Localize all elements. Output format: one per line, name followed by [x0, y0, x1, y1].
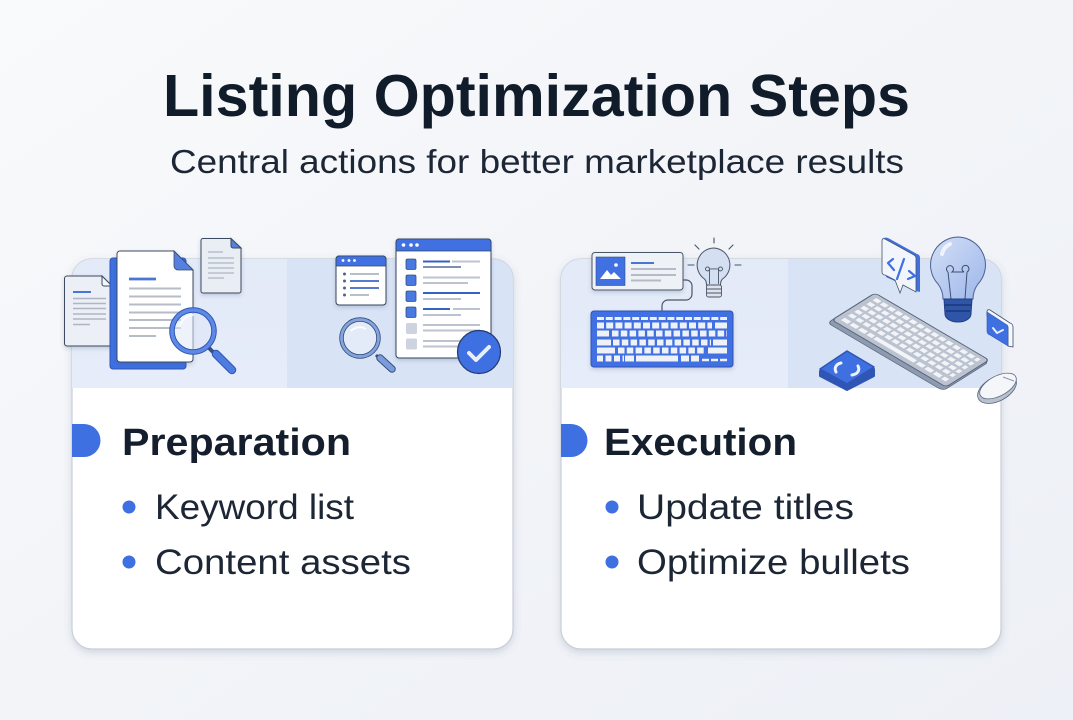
- icon: flat keyboard with card and bulb: [591, 238, 741, 367]
- icon: flat keyboard: [591, 311, 733, 367]
- icon: 3D light bulb: [931, 237, 985, 322]
- title: Listing Optimization Steps: [163, 63, 910, 129]
- list item: optimize bullets: Optimize bullets: [637, 543, 910, 582]
- icon: check tile: [987, 310, 1013, 347]
- icon: check badge: [458, 330, 500, 374]
- icon: small magnifier: [342, 320, 392, 369]
- heading: execution: Execution: [604, 422, 797, 464]
- icon: isometric keyboard: [827, 293, 991, 391]
- icon: documents with magnifier: [64, 238, 241, 370]
- icon: main document: [110, 251, 193, 369]
- icon: refresh tile: [820, 351, 874, 390]
- icon: code speech bubble: [882, 238, 920, 293]
- infographic canvas: [62, 73, 1017, 658]
- icon: checklist windows with magnifier: [336, 239, 500, 374]
- list item: update titles: Update titles: [637, 488, 854, 527]
- heading marker: execution: [561, 424, 588, 457]
- header band: preparation: [72, 259, 513, 388]
- icon: image card: [592, 252, 683, 290]
- icon: large checklist window: [396, 239, 491, 358]
- panel: preparation: [72, 259, 513, 649]
- icon: left document: [64, 276, 112, 346]
- list item: content assets: Content assets: [155, 543, 411, 582]
- icon: mouse: [973, 368, 1021, 409]
- list item: keyword list: Keyword list: [155, 488, 354, 527]
- icon: top right document: [201, 238, 241, 293]
- icon: magnifier: [172, 310, 232, 370]
- header band: execution: [561, 259, 1001, 388]
- heading marker: preparation: [72, 424, 100, 457]
- heading: preparation: Preparation: [122, 422, 351, 464]
- subtitle: Central actions for better marketplace results: [170, 143, 904, 180]
- connector cable: [662, 280, 692, 311]
- icon: small list window: [336, 256, 386, 305]
- icon: flat light bulb: [688, 238, 741, 297]
- panel: execution: [561, 259, 1001, 649]
- icon: isometric keyboard scene: [820, 237, 1021, 409]
